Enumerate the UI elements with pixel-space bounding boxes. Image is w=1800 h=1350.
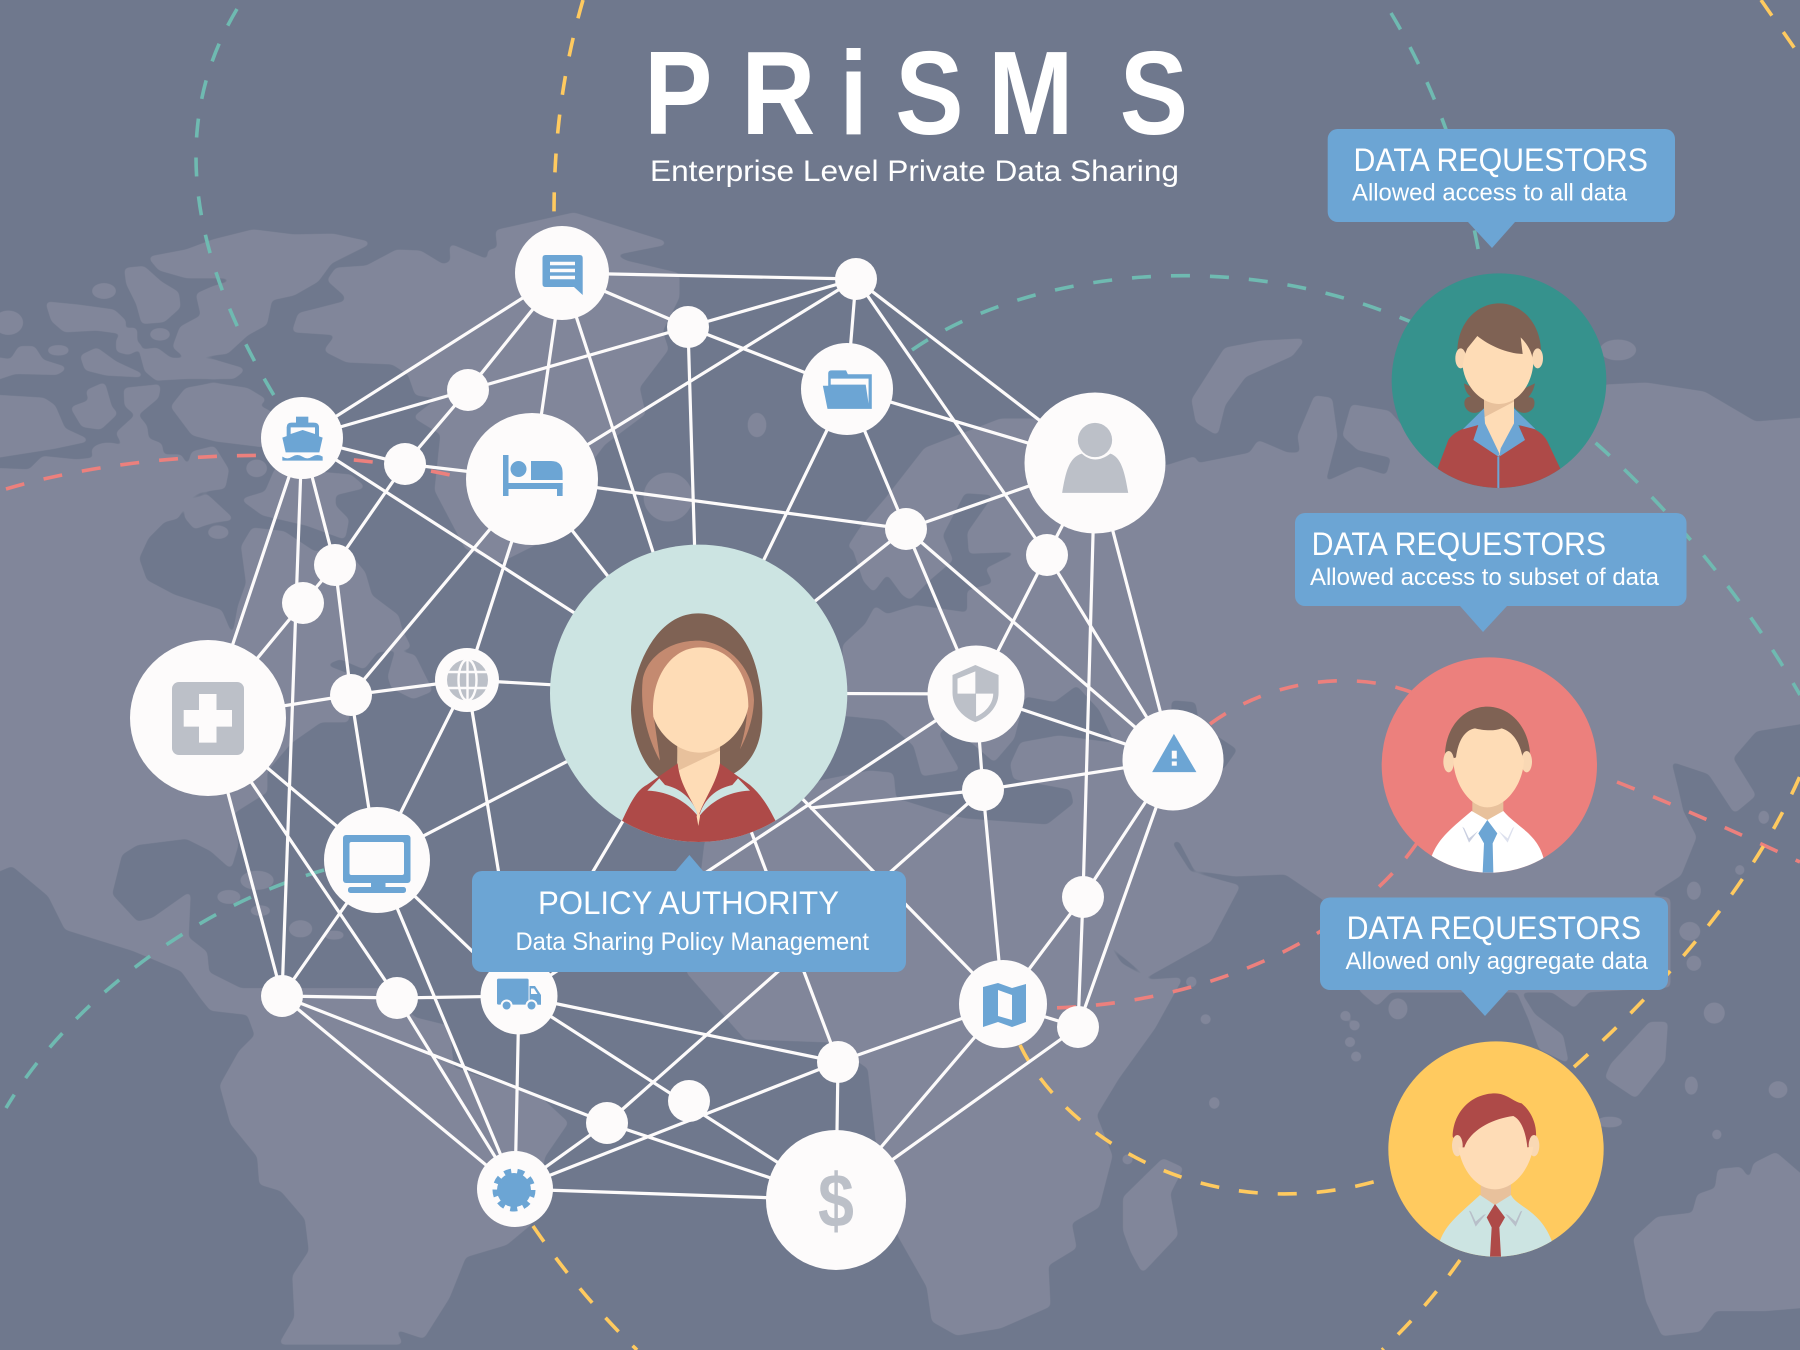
node: person [1024,392,1166,534]
node: folder [801,343,893,435]
callout: policy authority: Data Sharing Policy Management [516,928,869,956]
node: hospital [130,640,286,796]
title: PRiSMS [644,27,1188,160]
node: map [959,960,1047,1048]
callout: requestors subset: Allowed access to subset of data [1310,564,1660,591]
node: truck [480,958,558,1034]
node: gear [477,1151,553,1227]
node: globe [435,648,499,712]
callout: policy authority: POLICY AUTHORITY [538,885,839,921]
node: bed [466,413,598,545]
node: monitor [324,807,430,913]
callout: requestors aggregate [1320,898,1668,1016]
callout: requestors aggregate: DATA REQUESTORS [1347,910,1641,946]
avatar: requestor subset [1382,657,1597,873]
callout: requestors aggregate: Allowed only aggregate data [1346,948,1649,975]
avatar: requestor all data [1392,273,1606,490]
network connection lines [208,273,1173,1200]
callout: policy authority [472,855,906,972]
callout: requestors all data [1328,129,1675,248]
callout: requestors subset [1295,513,1686,632]
subtitle: Enterprise Level Private Data Sharing [650,155,1179,188]
node: warning [1122,710,1224,810]
node: dollar [766,1130,906,1270]
node: chat [515,226,609,320]
small network nodes [261,258,1104,1144]
avatar: requestor aggregate [1388,1041,1604,1257]
node: shield [928,646,1024,742]
avatar: policy authority [550,545,847,842]
callout: requestors subset: DATA REQUESTORS [1312,526,1606,562]
node: dollar: $ [818,1158,854,1243]
callout: requestors all data: DATA REQUESTORS [1354,142,1648,178]
callout: requestors all data: Allowed access to all data [1352,180,1628,206]
node: ship [261,397,343,479]
